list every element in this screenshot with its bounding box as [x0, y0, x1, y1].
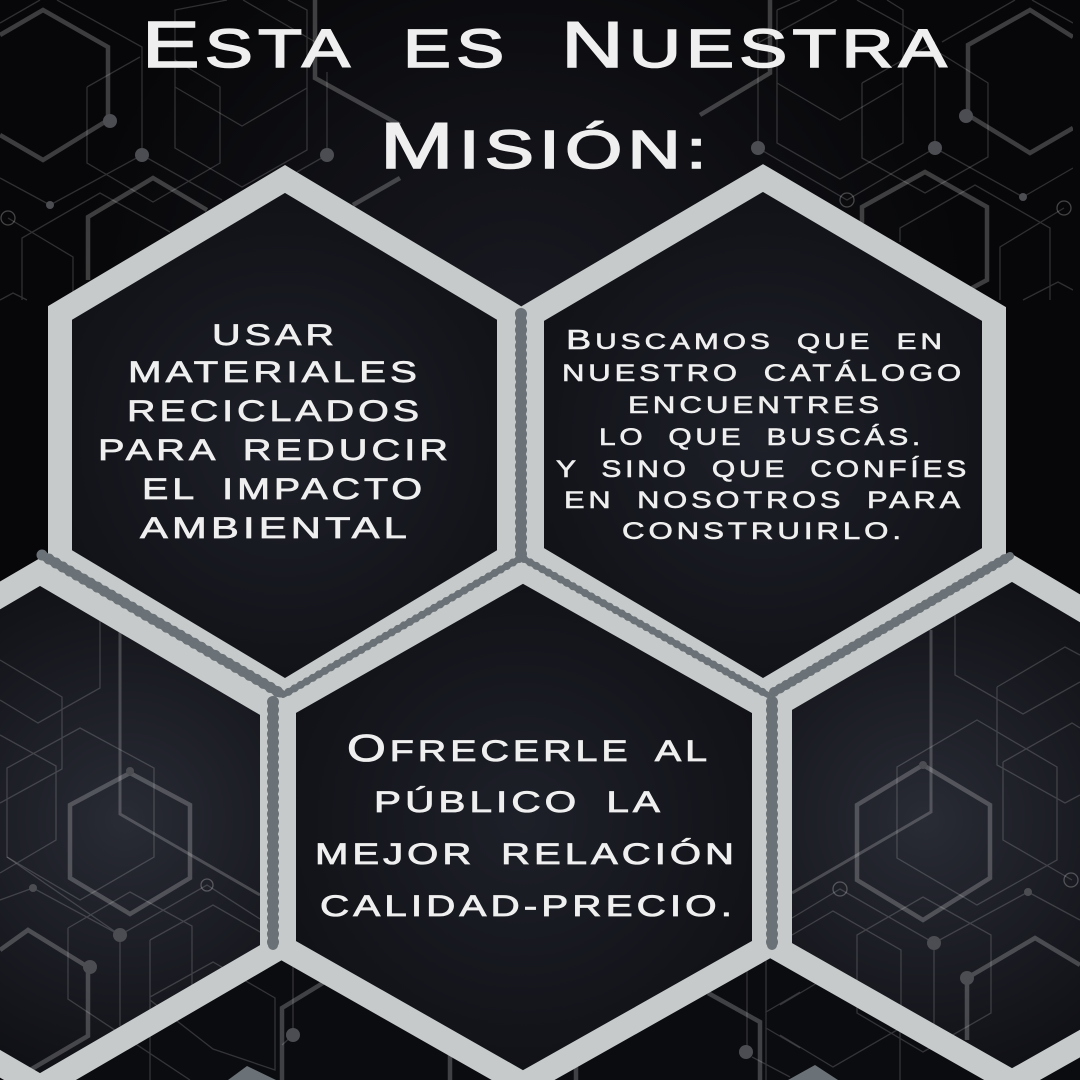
small decorative node: bottom left [228, 1066, 276, 1080]
text block: usar materiales reciclados: RECICLADOS [127, 395, 423, 428]
hexagon panel: top left [60, 179, 509, 692]
hexagon frame: lower right [780, 568, 1080, 1080]
small decorative node: bottom right [788, 1065, 838, 1080]
chain joints between hexagons [42, 314, 1010, 945]
background glow: left hexagon [0, 572, 272, 1080]
text block: mejor relación calidad-precio: CALIDAD-PRECIO. [320, 890, 736, 923]
text block: catálogo: ENCUENTRES [628, 392, 883, 419]
text block: usar materiales reciclados: MATERIALES [128, 356, 421, 389]
background glow: right hexagon [780, 568, 1080, 1080]
text block: usar materiales reciclados: PARA REDUCIR [98, 434, 452, 467]
text block: catálogo [556, 324, 970, 545]
text block: catálogo: EN NOSOTROS PARA [564, 487, 964, 514]
text block: mejor relación calidad-precio: O FRECERLE AL [347, 728, 711, 770]
text block: usar materiales reciclados: USAR [212, 319, 338, 352]
text block: catálogo: B USCAMOS QUE EN [566, 324, 946, 355]
text block: mejor relación calidad-precio: PÚBLICO LA [374, 786, 664, 819]
text block: catálogo: NUESTRO CATÁLOGO [562, 360, 965, 387]
text block: usar materiales reciclados [98, 319, 452, 545]
text block: catálogo: LO QUE BUSCÁS. [599, 424, 924, 451]
hexagon panel: top right [532, 178, 994, 692]
bottom strip background [0, 940, 1080, 1080]
title: M ISIÓN: [380, 109, 712, 182]
text block: usar materiales reciclados: AMBIENTAL [140, 512, 411, 545]
title: E STA ES N UESTRA [142, 8, 952, 81]
title [142, 8, 952, 182]
text block: catálogo: Y SINO QUE CONFÍES [556, 456, 970, 483]
hexagon panel: bottom center [284, 570, 764, 1080]
right edge fade [1073, 0, 1080, 300]
text block: mejor relación calidad-precio [315, 728, 738, 923]
text block: usar materiales reciclados: EL IMPACTO [142, 473, 426, 506]
hexagon frame: lower left [0, 572, 272, 1080]
text block: catálogo: CONSTRUIRLO. [622, 518, 905, 545]
text block: mejor relación calidad-precio: MEJOR RELACIÓN [315, 838, 738, 871]
